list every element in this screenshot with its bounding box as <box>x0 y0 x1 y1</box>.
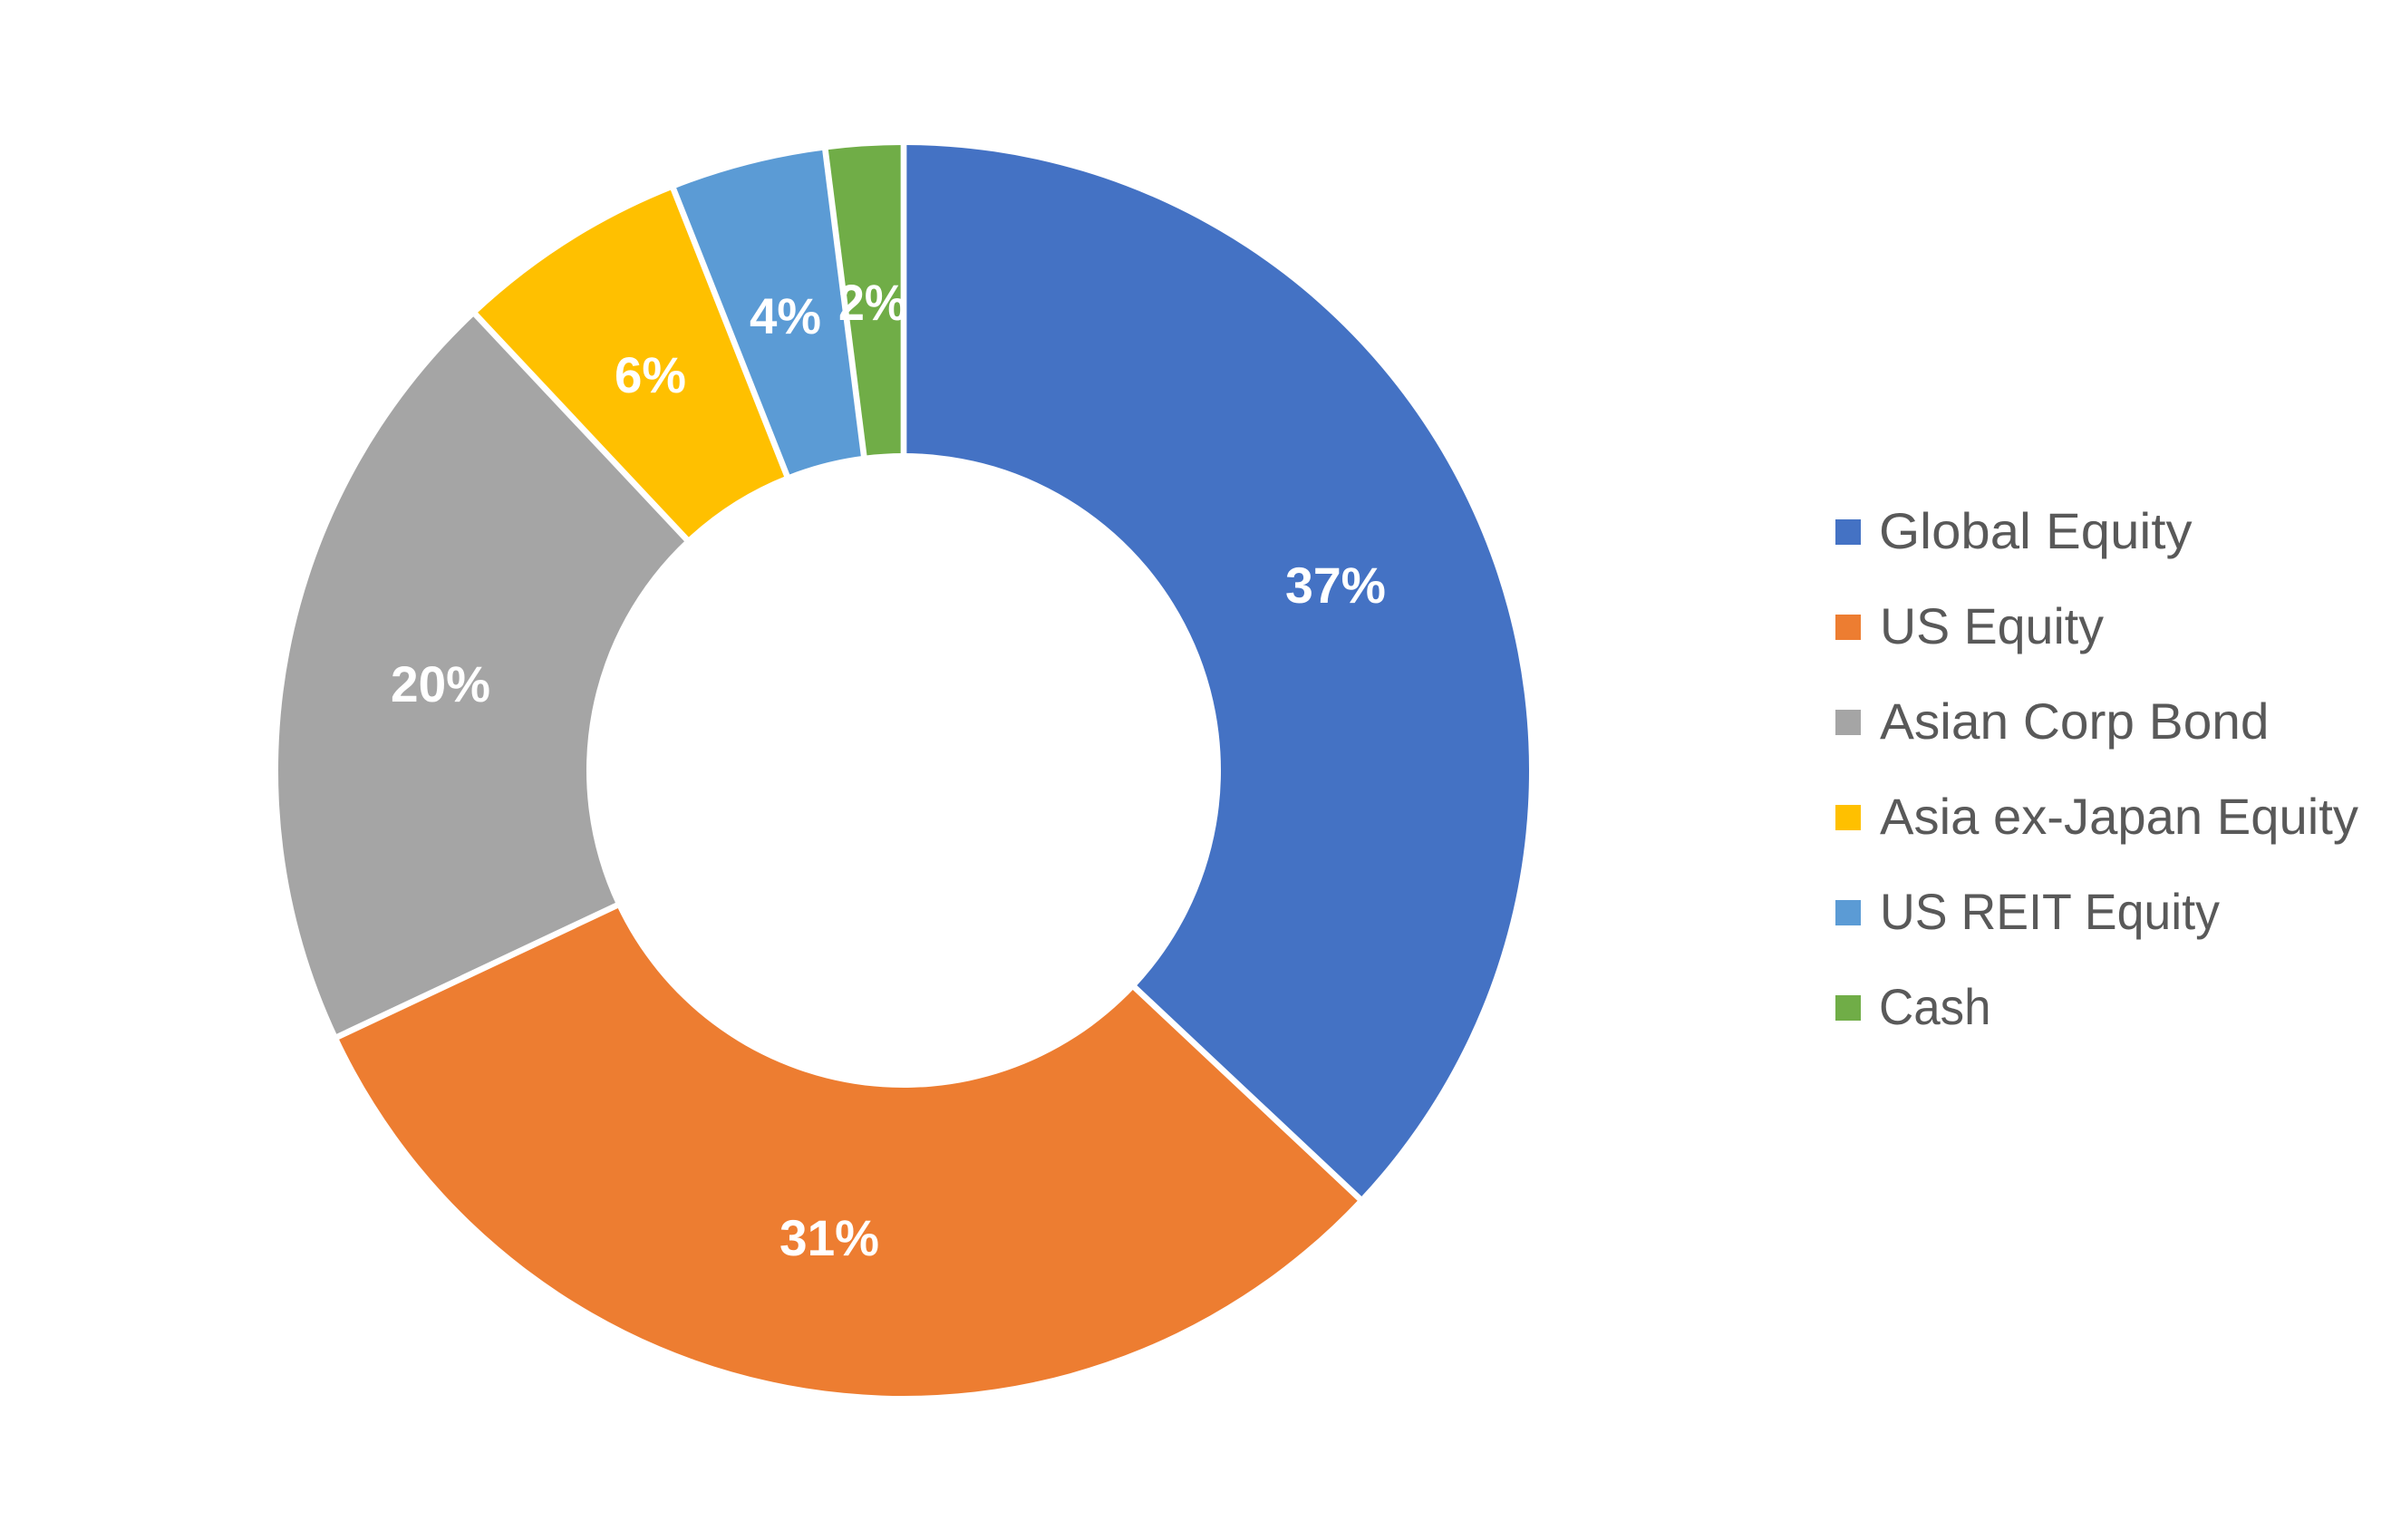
legend item: US Equity: US Equity <box>1880 597 2104 654</box>
data label: 20%: 20% <box>391 655 490 712</box>
data label: 4%: 4% <box>750 287 821 344</box>
segment: Cash 2% <box>826 145 904 456</box>
legend <box>1835 502 2358 1035</box>
legend item: US REIT Equity: US REIT Equity <box>1880 883 2220 940</box>
segment: Asia ex-Japan Equity 6% <box>476 189 787 539</box>
data label: 6%: 6% <box>615 346 686 403</box>
legend item: Asian Corp Bond: Asian Corp Bond <box>1880 693 2270 750</box>
legend item: Global Equity: Global Equity <box>1879 502 2192 559</box>
data label: 2%: 2% <box>838 274 906 331</box>
data labels <box>391 274 1386 1266</box>
legend item: Cash <box>1835 978 1990 1035</box>
donut chart <box>278 136 1529 1396</box>
segment: US Equity 31% <box>338 906 1360 1396</box>
segment: Asian Corp Bond 20% <box>278 315 686 1037</box>
data label: 37%: 37% <box>1285 557 1386 614</box>
legend item: Asia ex-Japan Equity: Asia ex-Japan Equity <box>1880 788 2358 845</box>
data label: 31%: 31% <box>779 1209 879 1266</box>
legend item: Cash: Cash <box>1879 978 1990 1035</box>
segment: Global Equity 37% <box>904 145 1529 1198</box>
segment: US REIT Equity 4% <box>673 150 864 476</box>
